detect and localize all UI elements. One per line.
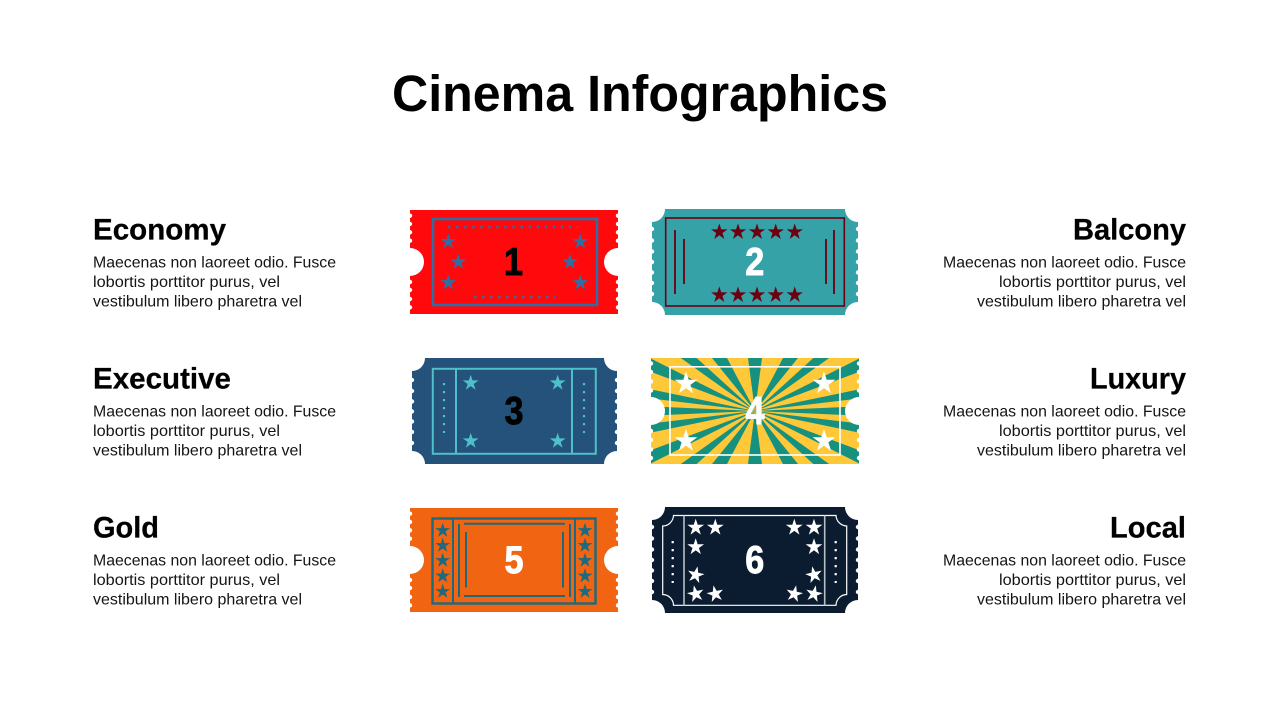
text block: Gold (93, 512, 336, 608)
number 2: 2 (745, 241, 764, 284)
body: Economy: vestibulum libero pharetra vel (93, 294, 302, 310)
heading: Executive: Executive (93, 362, 231, 396)
body: Gold: vestibulum libero pharetra vel (93, 592, 302, 608)
ticket 2: teal (650, 209, 860, 315)
body: Gold: Maecenas non laoreet odio. Fusce (93, 552, 336, 570)
body: Local: lobortis porttitor purus, vel (999, 572, 1186, 589)
body: Gold: lobortis porttitor purus, vel (93, 572, 280, 589)
ticket 3: navy blue (410, 358, 619, 464)
body: Economy: lobortis porttitor purus, vel (93, 274, 280, 291)
body: Luxury (943, 404, 1186, 460)
heading: Balcony: Balcony (1073, 214, 1186, 246)
body: Executive: lobortis porttitor purus, vel (93, 423, 280, 440)
text block: Luxury (943, 362, 1186, 460)
number 6: 6 (745, 539, 764, 582)
number 3: 3 (504, 390, 524, 433)
title: Cinema Infographics (392, 65, 888, 122)
heading: Luxury: Luxury (1090, 362, 1186, 396)
text block: Balcony (943, 214, 1186, 310)
body: Luxury: lobortis porttitor purus, vel (999, 423, 1186, 440)
body: Luxury: vestibulum libero pharetra vel (977, 442, 1186, 460)
body: Balcony: lobortis porttitor purus, vel (999, 274, 1186, 291)
body: Executive: vestibulum libero pharetra vel (93, 442, 302, 460)
body: Luxury: Maecenas non laoreet odio. Fusce (943, 404, 1186, 420)
body: Local (943, 552, 1186, 608)
heading: Local: Local (1110, 512, 1186, 544)
body: Executive: Maecenas non laoreet odio. Fusce (93, 404, 336, 420)
body: Gold (93, 552, 336, 608)
body: Economy: Maecenas non laoreet odio. Fusce (93, 254, 336, 272)
body: Executive (93, 404, 336, 460)
number 5: 5 (504, 539, 524, 582)
heading: Economy: Economy (93, 214, 226, 246)
body: Balcony (943, 254, 1186, 310)
body: Local: vestibulum libero pharetra vel (977, 592, 1186, 608)
body: Economy (93, 254, 336, 310)
body: Balcony: vestibulum libero pharetra vel (977, 294, 1186, 310)
heading: Gold: Gold (93, 512, 159, 544)
text block: Economy (93, 214, 336, 310)
ticket 1: red (396, 210, 632, 314)
text block: Executive (93, 362, 336, 460)
ticket 4: sunburst (651, 358, 859, 464)
number 4: 4 (746, 390, 765, 433)
number 1: 1 (504, 241, 523, 284)
body: Balcony: Maecenas non laoreet odio. Fusce (943, 254, 1186, 272)
body: Local: Maecenas non laoreet odio. Fusce (943, 552, 1186, 570)
ticket 6: dark navy (650, 507, 860, 613)
ticket 5: orange (396, 508, 632, 612)
text block: Local (943, 512, 1186, 608)
